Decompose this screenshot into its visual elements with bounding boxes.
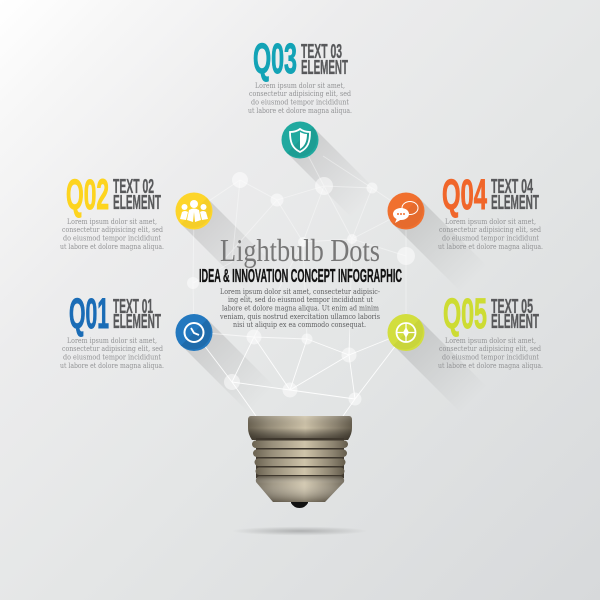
floor shadow	[232, 526, 368, 536]
Q02 body text: Lorem ipsum dolor sit amet,	[67, 218, 157, 226]
Q01 body text: do eiusmod tempor incididunt	[63, 354, 161, 362]
Q05 body text: do eiusmod tempor incididunt	[442, 354, 539, 362]
icon: speech bubbles	[388, 192, 424, 230]
Q01 label	[113, 296, 161, 333]
title: Lightbulb Dots	[220, 232, 380, 268]
Q05 label: TEXT 05	[491, 296, 533, 318]
Q05 label	[491, 296, 539, 333]
intro text block: Lorem ipsum dolor sit amet, consectetur adipisic-	[220, 287, 381, 296]
panel: Q01	[60, 290, 212, 370]
Q02 body text: do eiusmod tempor incididunt	[63, 234, 161, 242]
Q03 body text: do eiusmod tempor incididunt	[251, 98, 349, 106]
panel: Q04	[388, 171, 543, 251]
icon: compass	[388, 314, 424, 351]
Q04 label	[491, 176, 539, 214]
icon: people	[176, 192, 212, 230]
panel: Q02	[60, 171, 212, 251]
Q01 body text: Lorem ipsum dolor sit amet,	[67, 337, 157, 345]
Q01 label: ELEMENT	[113, 311, 161, 333]
Q01 body text: ut labore et dolore magna aliqua.	[60, 362, 164, 370]
panel: Q03: ELEMENT	[301, 57, 348, 79]
Q02 body text: ut labore et dolore magna aliqua.	[60, 243, 164, 251]
Q05 body text: Lorem ipsum dolor sit amet,	[445, 337, 536, 345]
Q03 body text: ut labore et dolore magna aliqua.	[248, 107, 352, 115]
panel: Q05	[388, 290, 543, 370]
Q02 label: TEXT 02	[113, 176, 154, 198]
Q04 label: ELEMENT	[491, 192, 539, 214]
Q01 body text	[60, 337, 164, 370]
panel: Q01: Q01	[69, 290, 109, 338]
panel: Q03	[248, 35, 352, 158]
Q05 body text: ut labore et dolore magna aliqua.	[438, 362, 543, 370]
Q04 body text	[438, 218, 543, 251]
Q02 body text: consectetur adipisicing elit, sed	[62, 226, 163, 234]
Q03 heading: Q03	[253, 35, 297, 83]
Q03 body text: consectetur adipisicing elit, sed	[249, 90, 351, 98]
Q03 label: TEXT 03	[301, 41, 342, 63]
intro text block: veniam, quis nostrud exercitation ullamco laboris	[219, 312, 380, 321]
icon: clock	[176, 314, 212, 351]
Q04 body text: ut labore et dolore magna aliqua.	[438, 243, 543, 251]
Q02 label: ELEMENT	[113, 192, 161, 214]
lightbulb network of dots	[187, 140, 415, 416]
intro text block: labore et dolore magna aliqua. Ut enim ad minim	[222, 304, 379, 312]
intro text block	[219, 287, 381, 329]
Q04 label: TEXT 04	[491, 176, 533, 198]
subtitle: IDEA & INNOVATION CONCEPT INFOGRAPHIC	[199, 265, 402, 286]
Q01 label: TEXT 01	[113, 296, 153, 318]
Q01 body text: consectetur adipisicing elit, sed	[62, 345, 163, 353]
Q05 body text	[438, 337, 543, 370]
Q04 body text: do eiusmod tempor incididunt	[442, 234, 539, 242]
icon: shield	[282, 122, 318, 158]
Q03 label	[301, 41, 348, 79]
Q02 label	[113, 176, 161, 214]
Q04 body text: consectetur adipisicing elit, sed	[439, 226, 541, 234]
Q05 body text: consectetur adipisicing elit, sed	[439, 345, 541, 353]
Q03 body text: Lorem ipsum dolor sit amet,	[255, 82, 345, 90]
long shadows of the icons	[181, 127, 487, 413]
Q05 heading: Q05	[443, 290, 487, 338]
Q04 heading: Q04	[442, 171, 487, 219]
Q03 body text	[248, 82, 352, 115]
Q02 heading: Q02	[66, 171, 109, 219]
intro text block: ing elit, sed do eiusmod tempor incididunt ut	[228, 295, 373, 304]
lightbulb base	[232, 416, 368, 536]
Q05 label: ELEMENT	[491, 311, 539, 333]
bulb tip	[291, 501, 308, 508]
Q02 body text	[60, 218, 164, 251]
Q04 body text: Lorem ipsum dolor sit amet,	[445, 218, 536, 226]
intro text block: nisi ut aliquip ex ea commodo consequat.	[233, 320, 366, 329]
